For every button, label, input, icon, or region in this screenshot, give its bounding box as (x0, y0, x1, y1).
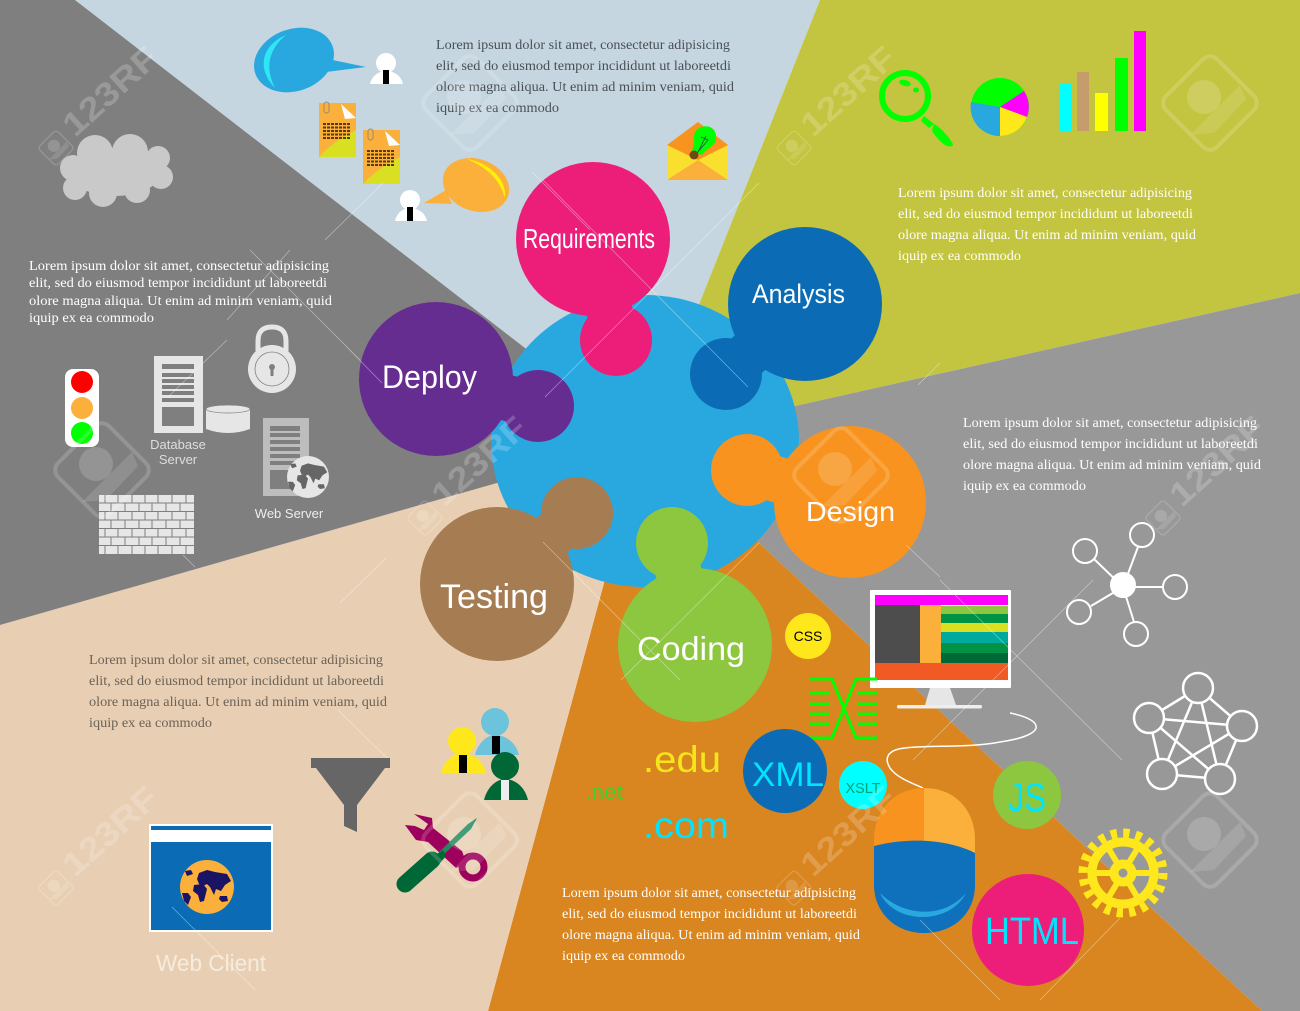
node: analysis: Analysis (752, 279, 845, 309)
panel: requirements background (75, 0, 820, 441)
icon: traffic light (65, 369, 99, 447)
icon: XML circle (743, 729, 827, 813)
panel: coding background (488, 441, 1262, 1011)
node: coding: Coding (637, 630, 745, 667)
bar chart (1060, 31, 1146, 131)
text block: design: iquip ex ea commodo (963, 478, 1086, 493)
icon: CSS circle (785, 613, 831, 659)
watermark layer: 123RF (793, 779, 903, 883)
icon: web server (263, 418, 329, 498)
icon: HTML circle (972, 874, 1084, 986)
icon: XSLT circle: XSLT (846, 780, 880, 797)
icon: person top (370, 53, 403, 84)
icon: HTML circle: HTML (985, 911, 1079, 953)
text block: design: elit, sed do eiusmod tempor incididunt ut laboreetdi (963, 436, 1258, 451)
watermark layer: 123RF (793, 39, 903, 143)
central hub circle (491, 295, 799, 587)
icon: star network (1067, 523, 1187, 646)
panel: analysis background (645, 0, 1300, 441)
text block: coding: olore magna aliqua. Ut enim ad minim veniam, quid (562, 927, 860, 942)
text block: analysis: elit, sed do eiusmod tempor incididunt ut laboreetdi (898, 206, 1193, 221)
text block: testing (89, 652, 387, 730)
icon: database cylinder (206, 405, 250, 433)
node: analysis (690, 227, 882, 410)
icon: mouse (874, 788, 975, 933)
panel: deploy background (0, 0, 645, 625)
text block: analysis (898, 185, 1196, 263)
icon: orange speech bubble (424, 149, 517, 221)
text block: requirements: olore magna aliqua. Ut enim ad minim veniam, quid (436, 79, 734, 94)
node: coding (618, 507, 772, 722)
text block: requirements (436, 37, 734, 115)
watermark layer: 123RF (1162, 409, 1272, 513)
text block: coding (562, 885, 860, 963)
watermark layer: 123RF (424, 409, 534, 513)
icon: document 1 (319, 102, 356, 157)
icon: mouse cord (887, 713, 1036, 788)
icon: gear (1083, 833, 1163, 913)
icon: brick wall (99, 495, 194, 554)
text block: deploy: iquip ex ea commodo (29, 310, 154, 325)
icon: document 2 (363, 129, 400, 184)
label: .edu: .edu (643, 739, 721, 780)
icon: XML circle: XML (752, 756, 824, 794)
icon: magnifier (882, 73, 953, 146)
icon: web client window (149, 824, 273, 932)
text block: analysis: olore magna aliqua. Ut enim ad minim veniam, quid (898, 227, 1196, 242)
icon: wrench and screwdriver (405, 814, 484, 884)
icon: XSLT circle (839, 761, 887, 809)
panel: testing background (0, 441, 645, 1011)
text block: analysis: Lorem ipsum dolor sit amet, consectetur adipisicing (898, 185, 1192, 200)
panel: design background (645, 293, 1300, 1011)
icon: person lower (395, 190, 427, 221)
text block: testing: olore magna aliqua. Ut enim ad minim veniam, quid (89, 694, 387, 709)
text block: deploy: elit, sed do eiusmod tempor incididunt ut laboreetdi (29, 275, 327, 290)
text block: design: Lorem ipsum dolor sit amet, consectetur adipisicing (963, 415, 1257, 430)
node: deploy (359, 302, 574, 456)
text block: design: olore magna aliqua. Ut enim ad minim veniam, quid (963, 457, 1261, 472)
icon: cloud (60, 134, 173, 207)
icon: CSS circle: CSS (794, 628, 822, 644)
text block: deploy (29, 258, 332, 325)
text block: coding: elit, sed do eiusmod tempor incididunt ut laboreetdi (562, 906, 857, 921)
label: database server: Database (150, 437, 206, 452)
node: design: Design (806, 496, 895, 527)
text block: requirements: Lorem ipsum dolor sit amet, consectetur adipisicing (436, 37, 730, 52)
text block: testing: elit, sed do eiusmod tempor incididunt ut laboreetdi (89, 673, 384, 688)
node: deploy: Deploy (382, 359, 477, 395)
text block: requirements: iquip ex ea commodo (436, 100, 559, 115)
icon: people group (441, 708, 528, 800)
label: database server: Server (159, 452, 198, 467)
text block: deploy: olore magna aliqua. Ut enim ad minim veniam, quid (29, 293, 332, 308)
label: .net: .net (585, 782, 624, 804)
icon: envelope with light bulb (667, 122, 728, 180)
icon: JS circle (993, 761, 1061, 829)
icon: JS circle: JS (1008, 776, 1046, 820)
watermark layer: 123RF (55, 779, 165, 883)
text block: testing: Lorem ipsum dolor sit amet, consectetur adipisicing (89, 652, 383, 667)
label: web client: Web Client (156, 950, 267, 976)
node: design (711, 426, 926, 578)
icon: monitor (870, 590, 1011, 708)
icon: padlock (248, 327, 296, 393)
text block: requirements: elit, sed do eiusmod tempor incididunt ut laboreetdi (436, 58, 731, 73)
watermark layer: 123RF (55, 39, 165, 143)
icon: XML transform (810, 679, 877, 738)
text block: coding: iquip ex ea commodo (562, 948, 685, 963)
text block: analysis: iquip ex ea commodo (898, 248, 1021, 263)
icon: blue speech bubble (245, 17, 366, 103)
center process diagram (359, 162, 926, 722)
text block: testing: iquip ex ea commodo (89, 715, 212, 730)
icon: mesh network (1134, 673, 1257, 794)
node: requirements (516, 162, 670, 376)
text block: coding: Lorem ipsum dolor sit amet, consectetur adipisicing (562, 885, 856, 900)
label: database server (150, 437, 206, 467)
label: web server: Web Server (255, 506, 324, 521)
pie chart (971, 78, 1029, 136)
node: testing (420, 477, 613, 661)
icon: database server (154, 356, 203, 433)
label: .com: .com (643, 805, 729, 846)
text block: deploy: Lorem ipsum dolor sit amet, consectetur adipisicing (29, 258, 329, 273)
icon: funnel (311, 758, 390, 832)
node: testing: Testing (440, 578, 548, 616)
node: requirements: Requirements (523, 223, 655, 254)
text block: design (963, 415, 1261, 493)
